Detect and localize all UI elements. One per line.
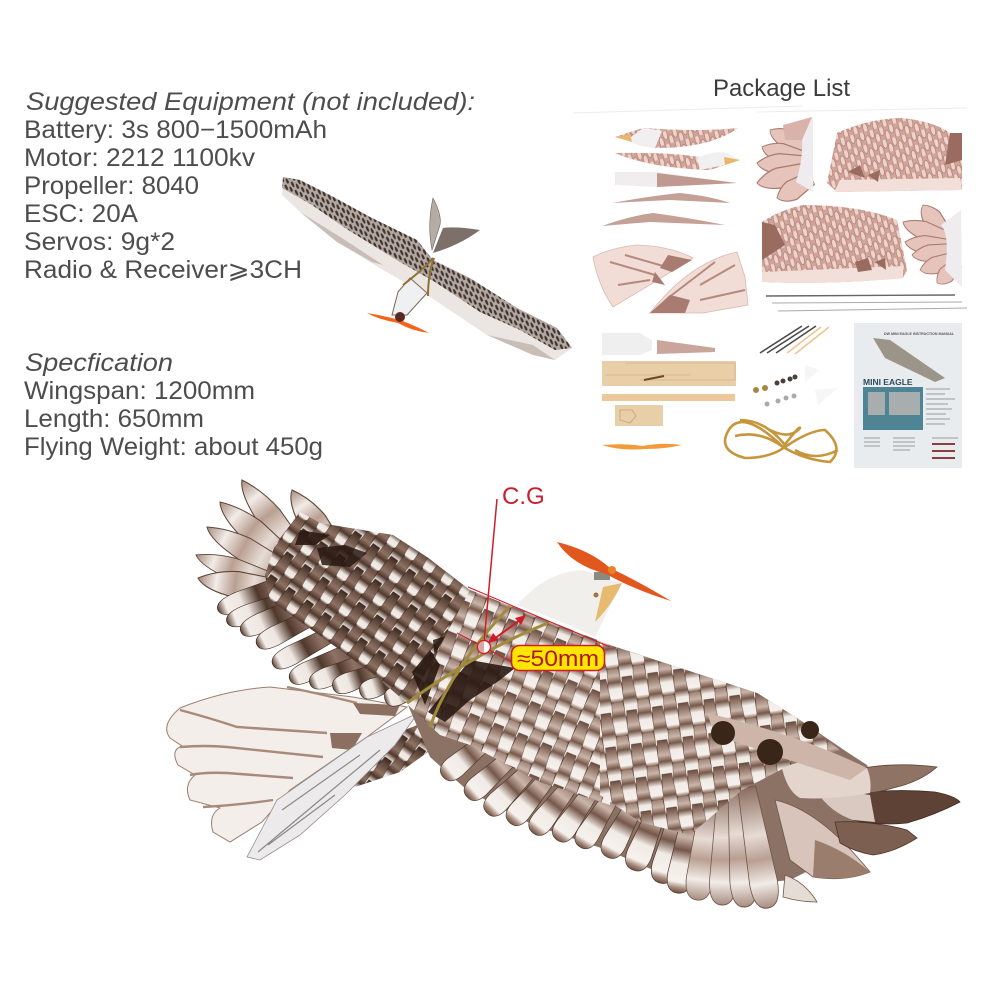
small eagle wing bbox=[282, 177, 572, 360]
fuselage piece strip bbox=[615, 172, 737, 187]
manual eagle bbox=[873, 338, 945, 382]
C.G marker bbox=[478, 640, 490, 654]
leading edge reference line bbox=[457, 587, 610, 662]
narrow foam pieces bbox=[602, 193, 730, 226]
carbon rods bbox=[766, 295, 967, 311]
text: wingspan: Wingspan: 1200mm bbox=[24, 377, 255, 405]
left wing finger primaries bbox=[192, 473, 356, 605]
text: motor: Motor: 2212 1100kv bbox=[24, 144, 256, 172]
panel: suggested equipment bbox=[24, 88, 475, 284]
fuselage side with head, right bbox=[615, 152, 740, 170]
panel: specification bbox=[24, 349, 323, 461]
right wing leading edge band bbox=[707, 713, 867, 780]
heading: package list: Package List bbox=[713, 75, 850, 102]
manual tools bbox=[932, 444, 955, 458]
motor bbox=[594, 572, 610, 580]
manual text bbox=[864, 389, 958, 450]
wing sheet, upper bbox=[827, 118, 962, 192]
text: length: Length: 650mm bbox=[24, 405, 204, 433]
orange propeller bbox=[602, 444, 682, 450]
text: radio and receiver: Radio & Receiver⩾3CH bbox=[24, 256, 302, 284]
heading: specification: Specfication bbox=[25, 349, 173, 377]
callout: centre of gravity bbox=[457, 483, 610, 671]
manual header: DW MINI EAGLE INSTRUCTION MANUAL bbox=[884, 332, 955, 336]
leader line bbox=[484, 499, 497, 643]
text: servos: Servos: 9g*2 bbox=[24, 228, 175, 256]
rubber bands bbox=[725, 420, 838, 462]
text: esc: ESC: 20A bbox=[24, 200, 138, 228]
text: battery: Battery: 3s 800−1500mAh bbox=[24, 116, 327, 144]
right wing underlay bbox=[408, 590, 880, 885]
left wing trailing feathers bbox=[214, 559, 446, 709]
eye bbox=[594, 592, 598, 598]
large eagle plane photo bbox=[167, 473, 960, 910]
right wing inner covert scales bbox=[408, 590, 610, 805]
right wing bbox=[408, 590, 960, 910]
double-headed arrow bbox=[488, 615, 526, 643]
text: flying weight: Flying Weight: about 450g bbox=[24, 433, 323, 461]
propeller bbox=[557, 542, 671, 601]
fan tail piece, lower bbox=[900, 200, 964, 289]
heading: suggested equipment: Suggested Equipment (not included): bbox=[26, 88, 475, 116]
manual title: MINI EAGLE bbox=[863, 377, 913, 387]
right wing long vertical primaries bbox=[684, 784, 782, 910]
wood strip bbox=[602, 394, 735, 401]
left wing covert scales bbox=[265, 512, 495, 712]
fan tail piece, upper bbox=[755, 117, 817, 208]
fuselage and head bbox=[517, 570, 622, 637]
instruction manual bbox=[854, 323, 962, 468]
plywood sheet bbox=[602, 361, 736, 386]
right wing trailing feathers bbox=[436, 723, 704, 895]
small eagle rubber bands bbox=[403, 258, 434, 296]
fuselage side with head, left bbox=[615, 128, 738, 148]
pushrods bbox=[760, 326, 816, 353]
tail fin vertical bbox=[247, 713, 430, 860]
tail pieces bbox=[593, 245, 748, 313]
white foam and pink tail piece bbox=[602, 333, 715, 355]
badge: 50mm: ≈50mm bbox=[517, 646, 599, 671]
right wing outer covert scales bbox=[600, 642, 840, 835]
small eagle fuselage bbox=[392, 278, 427, 315]
motor mount plate bbox=[615, 405, 663, 426]
small eagle propeller bbox=[367, 312, 429, 333]
clear plastic parts bbox=[805, 365, 838, 405]
small eagle plane photo bbox=[282, 177, 572, 360]
small eagle tail bbox=[430, 198, 480, 253]
right wing outer primaries bbox=[775, 758, 960, 902]
text: propeller: Propeller: 8040 bbox=[24, 172, 199, 200]
orange pushrods bbox=[787, 327, 829, 354]
tail fin horizontal bbox=[167, 687, 407, 842]
beak bbox=[595, 583, 622, 622]
wing sheet, lower bbox=[762, 205, 907, 283]
right wing dark markings bbox=[412, 650, 515, 722]
rubber bands bbox=[407, 606, 548, 727]
divider lines bbox=[573, 106, 967, 113]
left wing bbox=[192, 473, 495, 712]
hardware screws bbox=[753, 374, 798, 406]
panel: package list bbox=[573, 75, 967, 468]
manual parts inside photo bbox=[868, 392, 920, 415]
manual parts photo bbox=[863, 387, 923, 430]
left wing dark markings bbox=[295, 530, 465, 700]
label: C.G: C.G bbox=[502, 483, 545, 510]
